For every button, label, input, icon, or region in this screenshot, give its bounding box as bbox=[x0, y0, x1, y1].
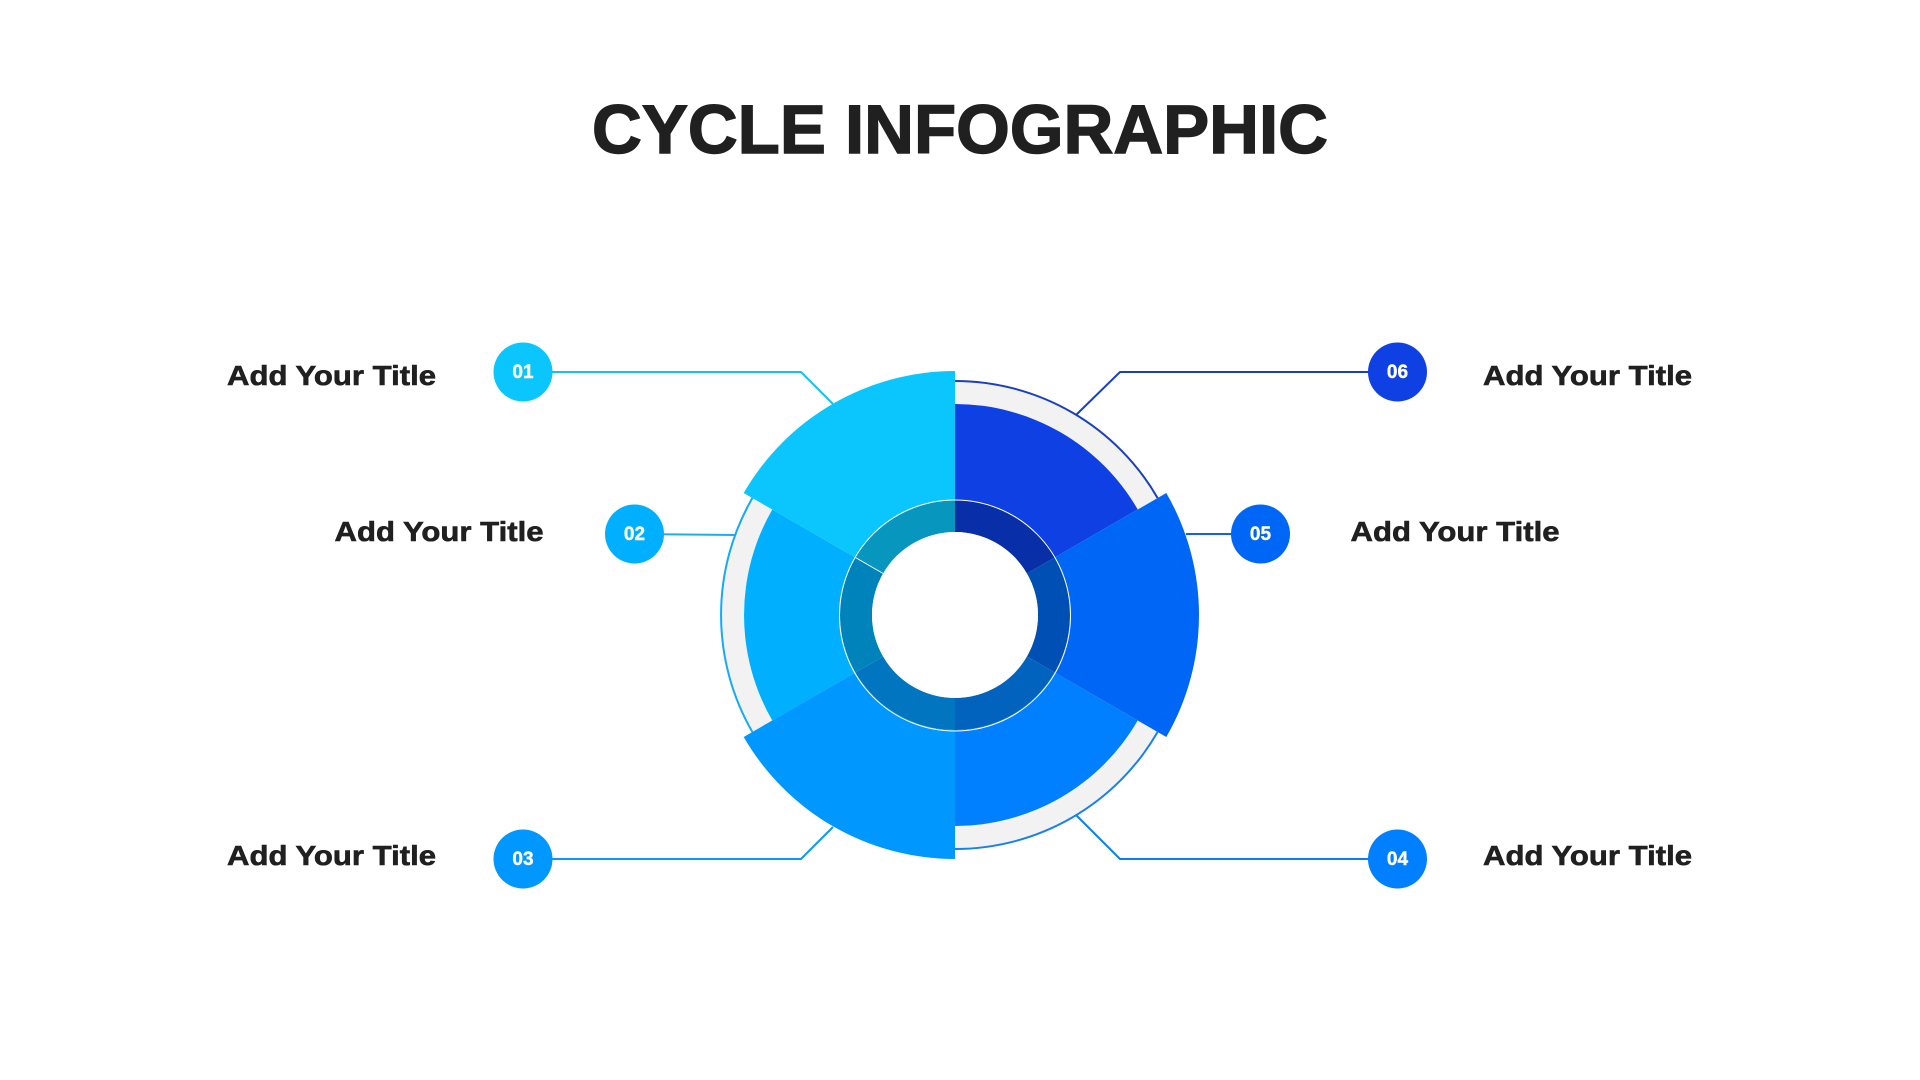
item 05 badge: 05 bbox=[1250, 524, 1271, 545]
item 06 badge: 06 bbox=[1387, 362, 1408, 383]
item 01 badge: 01 bbox=[512, 362, 534, 383]
item 06 badge bbox=[1368, 342, 1427, 402]
item 03 badge: 03 bbox=[512, 849, 534, 870]
connector lines bbox=[523, 372, 1397, 859]
segment 02 bbox=[744, 510, 855, 720]
item 05 label: Add Your Title bbox=[1350, 516, 1560, 547]
inner ring bbox=[840, 500, 1070, 731]
item 03 label: Add Your Title bbox=[227, 840, 436, 871]
item 03 badge bbox=[494, 830, 552, 888]
item 02 badge: 02 bbox=[624, 524, 645, 545]
item 04 badge: 04 bbox=[1387, 849, 1408, 870]
item 01 label: Add Your Title bbox=[227, 360, 436, 391]
background ring bbox=[733, 393, 1177, 837]
segment 05 bbox=[1055, 493, 1199, 737]
cycle diagram bbox=[721, 371, 1199, 859]
item 01 badge bbox=[494, 342, 552, 402]
item 02 label: Add Your Title bbox=[334, 516, 544, 547]
item 04 label: Add Your Title bbox=[1483, 840, 1692, 871]
title: CYCLE INFOGRAPHIC bbox=[592, 91, 1328, 168]
segment 04 bbox=[955, 672, 1138, 826]
segment 01 bbox=[744, 371, 955, 558]
item 02 badge bbox=[605, 504, 664, 564]
outer accent arcs bbox=[721, 381, 1158, 849]
segment 03 bbox=[744, 672, 955, 859]
item 04 badge bbox=[1368, 830, 1427, 888]
item 05 badge bbox=[1231, 504, 1290, 564]
segment 06 bbox=[955, 404, 1138, 558]
item 06 label: Add Your Title bbox=[1483, 360, 1692, 391]
